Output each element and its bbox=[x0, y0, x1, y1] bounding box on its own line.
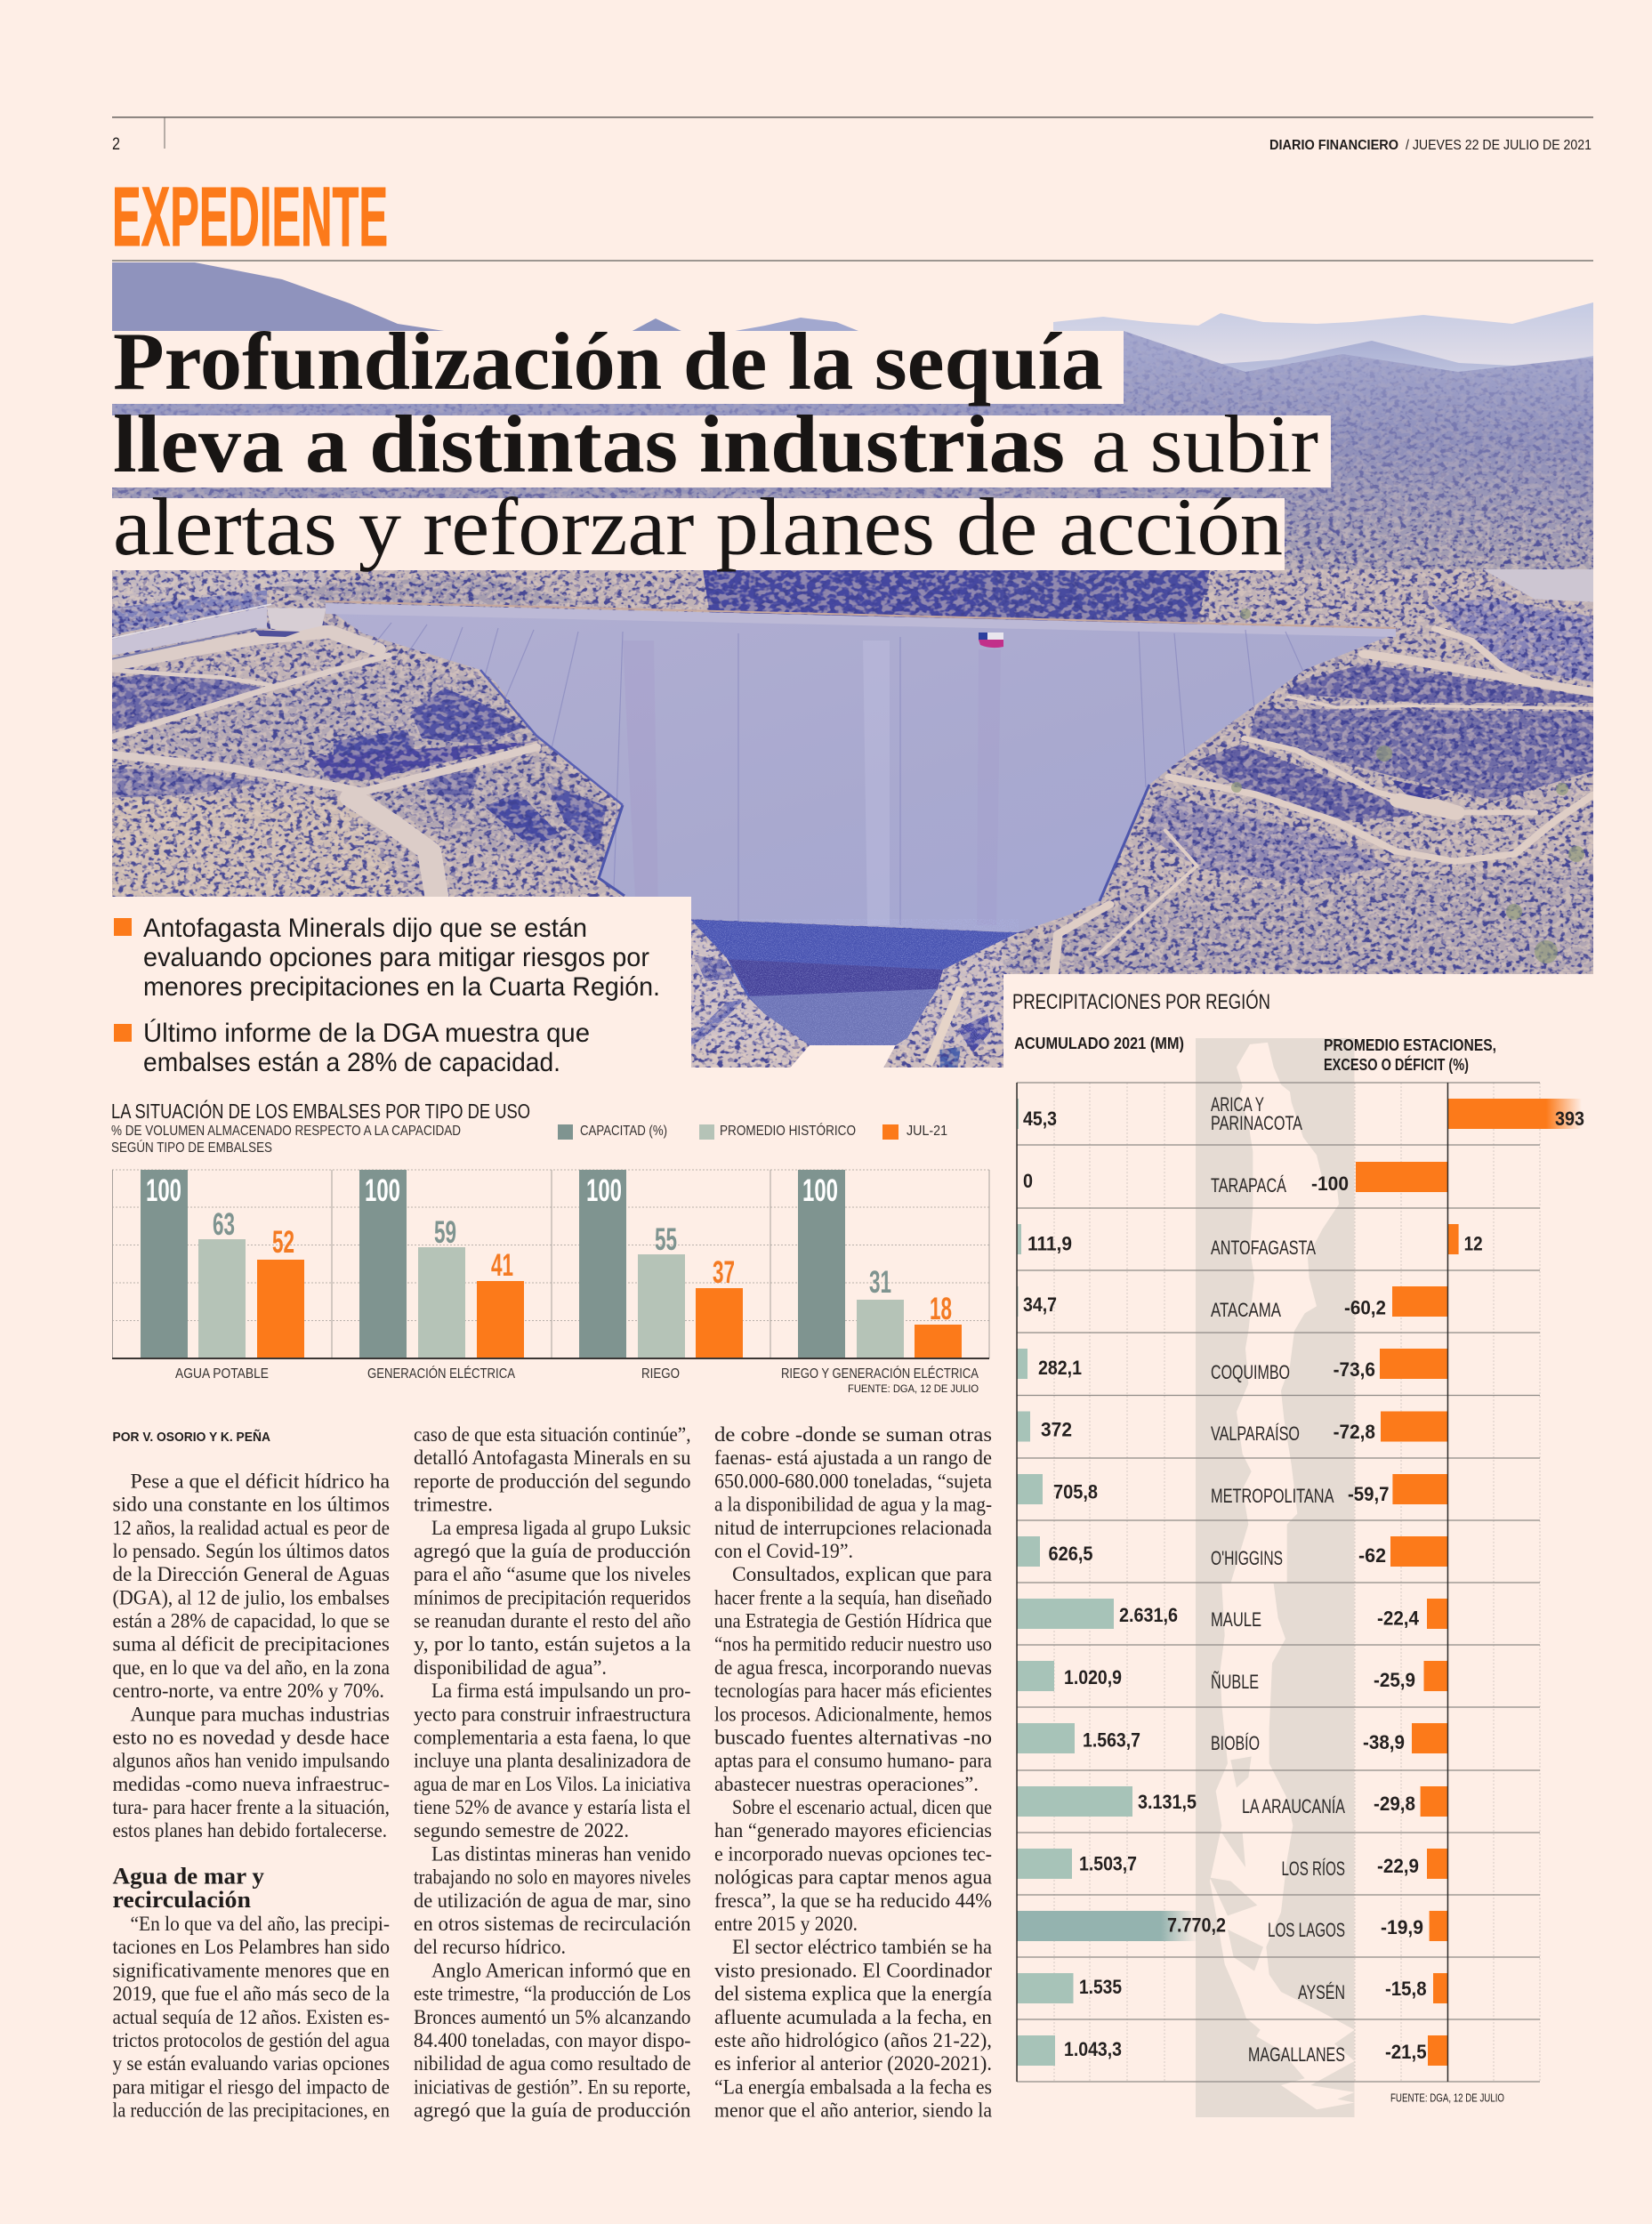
values: accumulated rainfall: 3.131,5 bbox=[1138, 1791, 1197, 1813]
panel: embalses chart bbox=[111, 1100, 989, 1395]
article column 3: visto presionado. El Coordinador bbox=[714, 1959, 992, 1981]
bullet 2: Último informe de la DGA muestra que bbox=[143, 1019, 590, 1048]
bars: generación eléctrica: 41 bbox=[491, 1248, 513, 1283]
source note: FUENTE: DGA, 12 DE JULIO bbox=[1390, 2092, 1504, 2105]
region labels: COQUIMBO bbox=[1211, 1361, 1290, 1383]
page header: 2 bbox=[112, 135, 120, 154]
article column 2: Bronces aumentó un 5% alcanzando bbox=[414, 2006, 690, 2028]
article column 1: significativamente menores que en bbox=[112, 1959, 390, 1981]
article column 3: “nos ha permitido reducir nuestro uso bbox=[714, 1633, 992, 1656]
photo: shrubs bbox=[1231, 608, 1584, 963]
article column 1: centro-norte, va entre 20% y 70%. bbox=[112, 1680, 384, 1702]
bullet 1: Antofagasta Minerals dijo que se están bbox=[143, 914, 587, 943]
values: accumulated rainfall: 626,5 bbox=[1048, 1543, 1092, 1565]
article column 2: en otros sistemas de recirculación bbox=[414, 1913, 691, 1935]
region labels: LA ARAUCANÍA bbox=[1242, 1795, 1345, 1817]
page header bbox=[112, 117, 1593, 154]
values: excess or deficit: -100 bbox=[1311, 1172, 1349, 1195]
article column 2: yecto para construir infraestructura bbox=[414, 1703, 690, 1725]
article column 3: Sobre el escenario actual, dicen que bbox=[732, 1796, 992, 1818]
bars: riego: 55 bbox=[655, 1222, 677, 1257]
category labels: AGUA POTABLE bbox=[175, 1366, 269, 1382]
bars: agua potable: 63 bbox=[213, 1207, 235, 1242]
category labels: RIEGO Y GENERACIÓN ELÉCTRICA bbox=[781, 1365, 979, 1382]
article column 3: menor que el año anterior, siendo la bbox=[714, 2099, 992, 2121]
photo: hillside base bbox=[112, 331, 1593, 1068]
article column 2: trabajando no solo en mayores niveles bbox=[414, 1866, 691, 1889]
bars: generación eléctrica bbox=[359, 1170, 524, 1358]
legend bbox=[558, 1122, 947, 1140]
article column 2: del recurso hídrico. bbox=[414, 1936, 566, 1958]
article column 3: este año hidrológico (años 21-22), bbox=[714, 2029, 992, 2051]
photo: right roads and lot bbox=[1054, 569, 1593, 972]
rule under section heading bbox=[112, 260, 1593, 262]
bars: agua potable: 52 bbox=[272, 1225, 294, 1260]
values: excess or deficit: -29,8 bbox=[1374, 1793, 1415, 1815]
photo: left roads and spillway bbox=[112, 604, 536, 896]
region labels: VALPARAÍSO bbox=[1211, 1422, 1300, 1445]
values: excess or deficit: -73,6 bbox=[1334, 1358, 1375, 1381]
region labels: ATACAMA bbox=[1211, 1299, 1281, 1321]
article column 1 bbox=[112, 1470, 390, 2121]
article column 1: 12 años, la realidad actual es peor de bbox=[112, 1517, 390, 1539]
values: accumulated rainfall: 34,7 bbox=[1023, 1293, 1057, 1316]
values: accumulated rainfall: 1.043,3 bbox=[1064, 2038, 1122, 2060]
chart heading: LA SITUACIÓN DE LOS EMBALSES POR TIPO DE USO bbox=[111, 1100, 530, 1123]
article column 3: entre 2015 y 2020. bbox=[714, 1913, 858, 1935]
article column 2: detalló Antofagasta Minerals en su bbox=[414, 1446, 691, 1469]
values: accumulated rainfall: 705,8 bbox=[1053, 1481, 1098, 1503]
article column 2: caso de que esta situación continúe”, bbox=[414, 1423, 690, 1446]
values: accumulated rainfall: 1.535 bbox=[1079, 1976, 1122, 1998]
values: excess or deficit: -22,9 bbox=[1377, 1855, 1419, 1877]
article column 3: de agua fresca, incorporando nuevas bbox=[714, 1656, 992, 1679]
article column 3: “La energía embalsada a la fecha es bbox=[714, 2075, 992, 2098]
legend: JUL-21 bbox=[907, 1124, 947, 1139]
bars: riego y generación eléctrica: 100 bbox=[802, 1173, 838, 1208]
article column 3: una Estrategia de Gestión Hídrica que bbox=[714, 1610, 992, 1632]
article column 3: con el Covid-19”. bbox=[714, 1540, 853, 1562]
photo: dark slope behind dam bbox=[703, 569, 1210, 627]
bars: riego y generación eléctrica: 31 bbox=[869, 1265, 891, 1300]
bars: riego: 37 bbox=[713, 1255, 735, 1290]
bars: riego: 100 bbox=[586, 1173, 622, 1208]
values: accumulated rainfall: 111,9 bbox=[1027, 1233, 1072, 1255]
photo: dam in arid landscape bbox=[112, 262, 1593, 1068]
values: accumulated rainfall: 1.563,7 bbox=[1083, 1729, 1140, 1751]
article column 1: sido una constante en los últimos bbox=[112, 1494, 390, 1516]
values: accumulated rainfall: 2.631,6 bbox=[1119, 1604, 1178, 1626]
article column 1: “En lo que va del año, las precipi- bbox=[130, 1913, 390, 1935]
chart heading: SEGÚN TIPO DE EMBALSES bbox=[111, 1139, 272, 1156]
values: excess or deficit: 12 bbox=[1464, 1233, 1483, 1255]
bullet 1: menores precipitaciones en la Cuarta Región. bbox=[143, 972, 660, 1002]
values: excess or deficit: -59,7 bbox=[1348, 1483, 1390, 1505]
values: excess or deficit: -60,2 bbox=[1344, 1297, 1386, 1318]
article column 3: a la disponibilidad de agua y la mag- bbox=[714, 1494, 992, 1516]
right column heading bbox=[1324, 1036, 1496, 1074]
article column 2: de utilización de agua de mar, sino bbox=[414, 1890, 690, 1912]
article column 3: nológicas para captar menos agua bbox=[714, 1866, 992, 1889]
article column 1: Pese a que el déficit hídrico ha bbox=[130, 1470, 390, 1492]
article column 1: taciones en Los Pelambres han sido bbox=[112, 1936, 390, 1958]
photo: left hill patches bbox=[112, 569, 610, 896]
article column 3: del sistema explica que la energía bbox=[714, 1983, 992, 2005]
article column 2: este trimestre, “la producción de Los bbox=[414, 1983, 691, 2005]
region labels: AYSÉN bbox=[1298, 1981, 1345, 2003]
region labels bbox=[1211, 1093, 1345, 2066]
values: accumulated rainfall: 282,1 bbox=[1038, 1357, 1082, 1379]
article column 1: que, en lo que va del año, en la zona bbox=[112, 1656, 390, 1679]
section heading: EXPEDIENTE bbox=[112, 170, 388, 264]
article column 3: es inferior al anterior (2020-2021). bbox=[714, 2052, 992, 2075]
title: Profundización de la sequía bbox=[113, 316, 1103, 407]
region labels: LOS RÍOS bbox=[1281, 1857, 1345, 1880]
values: accumulated rainfall: 0 bbox=[1023, 1170, 1033, 1192]
article column 3: nitud de interrupciones relacionada bbox=[714, 1517, 992, 1539]
article column 2: disponibilidad de agua”. bbox=[414, 1656, 607, 1679]
category labels bbox=[175, 1365, 979, 1382]
values: excess or deficit: -72,8 bbox=[1334, 1421, 1375, 1443]
bars: agua potable: 100 bbox=[146, 1173, 181, 1208]
article column 1: lo pensado. Según los últimos datos bbox=[112, 1540, 390, 1562]
article column 1: (DGA), al 12 de julio, los embalses bbox=[112, 1586, 390, 1608]
article column 2: iniciativas de gestión”. En su reporte, bbox=[414, 2075, 690, 2098]
article column 2: Las distintas mineras han venido bbox=[431, 1842, 690, 1865]
article column 1: medidas -como nueva infraestruc- bbox=[112, 1773, 390, 1795]
bullet 2: embalses están a 28% de capacidad. bbox=[143, 1048, 560, 1077]
photo: distant mountains bbox=[112, 262, 1593, 372]
bars: excess or deficit bbox=[1356, 1099, 1582, 2066]
article column 3: los procesos. Adicionalmente, hemos bbox=[714, 1703, 992, 1725]
article column 3: de cobre -donde se suman otras bbox=[714, 1423, 992, 1446]
bullet 2 bbox=[114, 1019, 590, 1077]
chart heading: % DE VOLUMEN ALMACENADO RESPECTO A LA CAPACIDAD bbox=[111, 1124, 461, 1139]
bars: accumulated rainfall bbox=[1017, 1099, 1197, 2066]
panel: precipitaciones por región bbox=[1003, 974, 1593, 2126]
article column 2: La empresa ligada al grupo Luksic bbox=[431, 1517, 690, 1539]
values: excess or deficit bbox=[1311, 1108, 1584, 2063]
chart title: PRECIPITACIONES POR REGIÓN bbox=[1012, 990, 1270, 1014]
photo: rock below dam bbox=[690, 928, 1019, 1068]
article column 1: están a 28% de capacidad, lo que se bbox=[112, 1610, 390, 1632]
article column 2: agregó que la guía de producción bbox=[414, 1540, 691, 1562]
article column 2: tiene 52% de avance y estaría lista el bbox=[414, 1796, 690, 1818]
article column 1: suma al déficit de precipitaciones bbox=[112, 1633, 390, 1656]
legend: PROMEDIO HISTÓRICO bbox=[720, 1122, 856, 1139]
panel: key points bbox=[112, 897, 691, 1077]
bullet 1 bbox=[114, 914, 660, 1002]
subheading: recirculación bbox=[112, 1887, 252, 1913]
region labels: MAGALLANES bbox=[1248, 2043, 1345, 2066]
values: excess or deficit: -15,8 bbox=[1385, 1978, 1427, 2000]
values: excess or deficit: -38,9 bbox=[1363, 1731, 1405, 1753]
photo: rocky texture bbox=[112, 331, 1593, 1068]
subheading bbox=[112, 1864, 264, 1913]
article column 3: afluente acumulada a la fecha, en bbox=[714, 2006, 993, 2028]
article column 3: abastecer nuestras operaciones”. bbox=[714, 1773, 979, 1795]
article column 3: faenas- está ajustada a un rango de bbox=[714, 1446, 992, 1469]
article column 2: se reanudan durante el resto del año bbox=[414, 1610, 690, 1632]
title bbox=[112, 316, 1331, 572]
page header: / JUEVES 22 DE JULIO DE 2021 bbox=[1406, 138, 1592, 153]
article column 1: estos planes han debido fortalecerse. bbox=[112, 1819, 387, 1841]
category labels: RIEGO bbox=[641, 1366, 680, 1382]
region labels: ARICA Y bbox=[1211, 1093, 1264, 1116]
source note: FUENTE: DGA, 12 DE JULIO bbox=[848, 1384, 979, 1395]
category labels: GENERACIÓN ELÉCTRICA bbox=[367, 1365, 515, 1382]
article column 2: nibilidad de agua como resultado de bbox=[414, 2052, 690, 2075]
bars: riego bbox=[579, 1170, 743, 1358]
region labels: ÑUBLE bbox=[1211, 1671, 1259, 1693]
bars: riego y generación eléctrica: 18 bbox=[930, 1292, 952, 1326]
map of Chile backdrop bbox=[1196, 1038, 1355, 2117]
values: accumulated rainfall bbox=[1023, 1108, 1226, 2060]
article column 2: para el año “asume que los niveles bbox=[414, 1563, 691, 1585]
article column 3: fresca”, la que se ha reducido 44% bbox=[714, 1890, 992, 1912]
region labels: ANTOFAGASTA bbox=[1211, 1237, 1316, 1259]
article column 1: la reducción de las precipitaciones, en bbox=[112, 2099, 390, 2121]
legend: CAPACITAD (%) bbox=[580, 1124, 667, 1139]
article column 1: 2019, que fue el año más seco de la bbox=[112, 1983, 390, 2005]
region labels: LOS LAGOS bbox=[1268, 1919, 1345, 1941]
values: accumulated rainfall: 7.770,2 bbox=[1167, 1914, 1226, 1936]
page header: DIARIO FINANCIERO bbox=[1269, 138, 1398, 153]
bars: generación eléctrica: 100 bbox=[365, 1173, 400, 1208]
title: alertas y reforzar planes de acción bbox=[113, 481, 1283, 572]
right column heading: PROMEDIO ESTACIONES, bbox=[1324, 1036, 1496, 1054]
values: accumulated rainfall: 1.503,7 bbox=[1079, 1853, 1137, 1875]
article column 3: han “generado mayores eficiencias bbox=[714, 1819, 992, 1841]
bullet 1: evaluando opciones para mitigar riesgos por bbox=[143, 943, 649, 972]
right column heading: EXCESO O DÉFICIT (%) bbox=[1324, 1055, 1469, 1074]
values: excess or deficit: -19,9 bbox=[1381, 1916, 1423, 1938]
article column 2: La firma está impulsando un pro- bbox=[431, 1680, 690, 1702]
values: excess or deficit: -22,4 bbox=[1377, 1608, 1420, 1630]
article column 2: 84.400 toneladas, con mayor dispo- bbox=[414, 2029, 690, 2051]
chart heading bbox=[111, 1100, 530, 1156]
article column 1: y se están evaluando varias opciones bbox=[112, 2052, 390, 2075]
bars: agua potable bbox=[141, 1170, 304, 1358]
photo: right hill patches bbox=[979, 569, 1593, 972]
article column 1: actual sequía de 12 años. Existen es- bbox=[112, 2006, 390, 2028]
article column 1: para mitigar el riesgo del impacto de bbox=[112, 2075, 390, 2098]
article column 2: y, por lo tanto, están sujetos a la bbox=[414, 1633, 690, 1656]
region labels: TARAPACÁ bbox=[1211, 1174, 1286, 1197]
bars: generación eléctrica: 59 bbox=[434, 1215, 456, 1250]
article column 2: agua de mar en Los Vilos. La iniciativa bbox=[414, 1773, 690, 1795]
values: accumulated rainfall: 45,3 bbox=[1023, 1108, 1057, 1130]
article column 3: 650.000-680.000 toneladas, “sujeta bbox=[714, 1470, 992, 1492]
photo: concrete dam face bbox=[326, 601, 1396, 932]
article column 1: de la Dirección General de Aguas bbox=[112, 1563, 390, 1585]
values: accumulated rainfall: 372 bbox=[1041, 1418, 1072, 1441]
article column 1: Aunque para muchas industrias bbox=[130, 1703, 390, 1725]
region labels: MAULE bbox=[1211, 1608, 1261, 1631]
article column 2: complementaria a esta faena, lo que bbox=[414, 1726, 690, 1749]
article column 2: incluye una planta desalinizadora de bbox=[414, 1750, 690, 1772]
bars: riego y generación eléctrica bbox=[798, 1170, 962, 1358]
values: accumulated rainfall: 1.020,9 bbox=[1064, 1666, 1122, 1688]
article column 3: Consultados, explican que para bbox=[732, 1563, 992, 1585]
article column 1: tura- para hacer frente a la situación, bbox=[112, 1796, 390, 1818]
title: a subir bbox=[1092, 399, 1318, 489]
article column 1: algunos años han venido impulsando bbox=[112, 1750, 390, 1772]
values: excess or deficit: -21,5 bbox=[1385, 2041, 1427, 2063]
region labels: BIOBÍO bbox=[1211, 1732, 1260, 1754]
article column 3: tecnologías para hacer más eficientes bbox=[714, 1680, 992, 1702]
region labels: METROPOLITANA bbox=[1211, 1485, 1334, 1507]
article column 2: mínimos de precipitación requeridos bbox=[414, 1586, 691, 1608]
values: excess or deficit: 393 bbox=[1555, 1108, 1584, 1130]
article column 2: segundo semestre de 2022. bbox=[414, 1819, 629, 1841]
article column 3: El sector eléctrico también se ha bbox=[732, 1936, 992, 1958]
article column 3: e incorporado nuevas opciones tec- bbox=[714, 1842, 992, 1865]
article column 3: aptas para el consumo humano- para bbox=[714, 1750, 992, 1772]
subheading: Agua de mar y bbox=[112, 1864, 264, 1890]
article column 2: reporte de producción del segundo bbox=[414, 1470, 690, 1492]
region labels: O'HIGGINS bbox=[1211, 1547, 1283, 1569]
article column 2: agregó que la guía de producción bbox=[414, 2099, 691, 2121]
article column 1: trictos protocolos de gestión del agua bbox=[112, 2029, 390, 2051]
photo: dam toe rockfill bbox=[690, 919, 1019, 1068]
article column 3: hacer frente a la sequía, han diseñado bbox=[714, 1586, 992, 1608]
article column 3: buscado fuentes alternativas -no bbox=[714, 1726, 992, 1749]
values: excess or deficit: -62 bbox=[1358, 1544, 1386, 1567]
article column 1: esto no es novedad y desde hace bbox=[112, 1726, 390, 1749]
left column heading: ACUMULADO 2021 (MM) bbox=[1014, 1035, 1184, 1052]
article column 2 bbox=[414, 1423, 691, 2121]
region labels: PARINACOTA bbox=[1211, 1112, 1302, 1134]
article byline: POR V. OSORIO Y K. PEÑA bbox=[112, 1429, 271, 1445]
values: excess or deficit: -25,9 bbox=[1374, 1669, 1415, 1691]
article column 2: trimestre. bbox=[414, 1494, 493, 1516]
article column 2: Anglo American informó que en bbox=[431, 1959, 691, 1981]
title: lleva a distintas industrias bbox=[113, 399, 1065, 489]
article column 3 bbox=[714, 1423, 993, 2121]
icon: Chilean flag on dam bbox=[979, 633, 1003, 648]
